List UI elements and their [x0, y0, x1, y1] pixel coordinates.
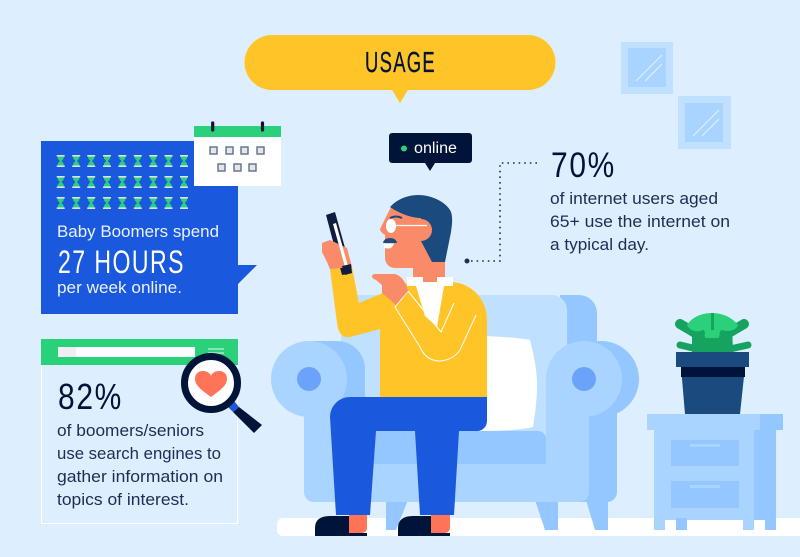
- text: search engines description: use search engines to: [57, 445, 221, 463]
- chair legs: [386, 500, 608, 530]
- right arm roll: [546, 341, 622, 417]
- ear: [410, 219, 432, 241]
- hair: [390, 195, 452, 262]
- tooltip: online: online: [414, 140, 457, 157]
- text: 27 hours: 27 HOURS: [58, 244, 185, 280]
- shirt: [407, 277, 453, 327]
- floor: [277, 518, 800, 536]
- hourglass grid: [57, 155, 188, 209]
- left shoe: [315, 515, 367, 536]
- pot: [681, 367, 745, 414]
- text: 82%: 82%: [58, 376, 123, 417]
- title pill: USAGE: USAGE: [365, 47, 436, 79]
- text block: 70%: a typical day.: [550, 236, 649, 254]
- sweater seams: [395, 291, 476, 361]
- phone screen stripe: [333, 223, 352, 275]
- dotted connector: [464, 163, 538, 264]
- text: per week online: per week online.: [57, 279, 182, 297]
- white pillow: [470, 336, 537, 431]
- text: baby boomers spend: Baby Boomers spend: [57, 223, 219, 241]
- nightstand: [647, 414, 783, 530]
- glasses: [386, 216, 427, 233]
- man using phone: [315, 195, 487, 536]
- neck and face: [380, 205, 445, 282]
- armchair: [271, 295, 639, 530]
- potted plant: [676, 313, 749, 414]
- pointing hand: [372, 274, 408, 305]
- icon: calendar: [194, 123, 281, 186]
- text: search engines description: topics of interest.: [57, 491, 189, 509]
- sweater: [330, 267, 487, 397]
- seat cushion: [340, 431, 546, 464]
- panel: 27 hours online: [41, 141, 257, 314]
- right shoe: [398, 515, 450, 536]
- trousers: [330, 397, 487, 515]
- hand holding phone: [322, 240, 352, 269]
- chair back: [560, 295, 597, 480]
- wall picture frames: [621, 42, 731, 149]
- phone body: [326, 212, 352, 275]
- tooltip: online: [389, 133, 472, 171]
- text block: 70%: 70%: [551, 146, 616, 185]
- icon: magnifier with heart: [184, 356, 262, 433]
- text: search engines description: [57, 422, 223, 509]
- text block: 70%: [550, 146, 730, 254]
- moustache and mouth: [383, 238, 397, 249]
- leaves: [680, 313, 748, 352]
- text: search engines description: gather information on: [57, 468, 223, 486]
- left arm rear: [313, 341, 365, 440]
- right arm rear: [575, 345, 617, 502]
- title pill: USAGE: [244, 35, 555, 103]
- chair base: [304, 400, 589, 502]
- text block: 70%: of internet users aged: [550, 190, 718, 208]
- panel: 82% search engines: [41, 339, 238, 524]
- left arm roll: [271, 341, 347, 417]
- text block: 70%: 65+ use the internet on: [550, 213, 730, 231]
- text: search engines description: of boomers/seniors: [57, 422, 204, 440]
